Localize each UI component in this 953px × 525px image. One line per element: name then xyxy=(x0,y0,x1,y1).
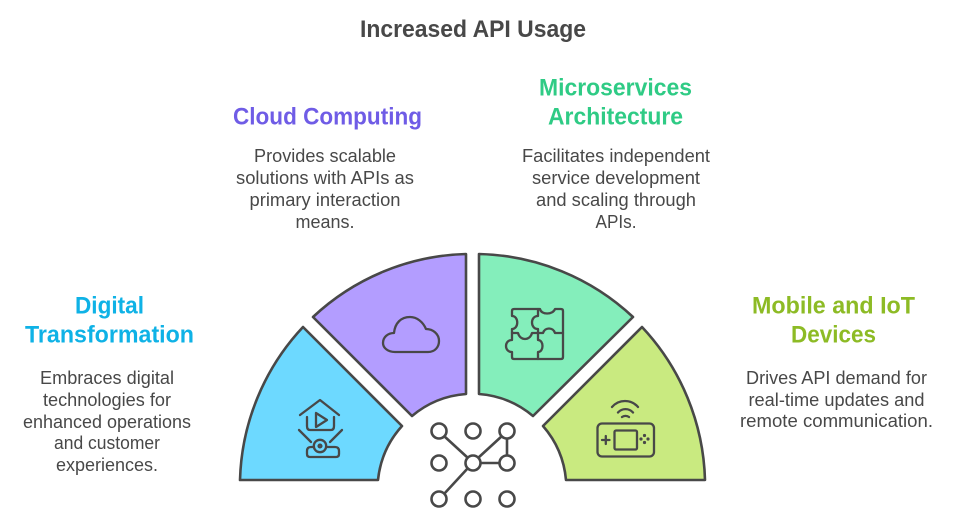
body: digital transformation: experiences. xyxy=(56,455,158,475)
segment: digital transformation xyxy=(240,327,402,480)
body: cloud computing: means. xyxy=(296,212,354,232)
heading: microservices architecture: Architecture xyxy=(548,104,683,130)
panel: microservices text xyxy=(522,74,710,232)
heading: cloud computing: Cloud Computing xyxy=(233,104,422,130)
heading: microservices architecture: Microservices xyxy=(539,74,692,102)
icon: home video device xyxy=(299,400,342,457)
heading: mobile and iot devices: Devices xyxy=(791,322,876,348)
body: microservices architecture xyxy=(522,146,710,232)
panel: digital transformation text xyxy=(23,292,194,475)
body: mobile and iot devices: real-time updates and xyxy=(748,390,924,410)
icon: puzzle xyxy=(506,309,563,359)
body: mobile and iot devices: remote communication. xyxy=(740,411,933,431)
heading: microservices architecture xyxy=(539,74,692,130)
title: Increased API Usage xyxy=(360,16,586,43)
body: cloud computing: primary interaction xyxy=(250,190,400,210)
heading: digital transformation: Digital xyxy=(75,292,144,320)
body: cloud computing: Provides scalable xyxy=(254,146,396,166)
body: mobile and iot devices: Drives API demand for xyxy=(746,368,927,388)
heading: digital transformation xyxy=(25,292,194,348)
body: cloud computing: solutions with APIs as xyxy=(236,168,414,188)
body: digital transformation: and customer xyxy=(54,433,160,453)
body: digital transformation: Embraces digital xyxy=(40,368,174,388)
segment: mobile and iot xyxy=(543,327,705,480)
heading: digital transformation: Transformation xyxy=(25,322,194,348)
body: digital transformation: technologies for xyxy=(43,390,171,410)
panel: mobile and iot text xyxy=(740,292,933,431)
body: digital transformation: enhanced operations xyxy=(23,412,191,432)
body: microservices architecture: APIs. xyxy=(596,212,636,232)
panel: cloud computing text xyxy=(233,104,422,232)
segment: cloud computing xyxy=(313,254,466,416)
icon: network nodes xyxy=(432,424,514,506)
body: digital transformation xyxy=(23,368,191,475)
icon: handheld game console xyxy=(598,401,654,456)
body: microservices architecture: Facilitates independent xyxy=(522,146,710,166)
segment: microservices xyxy=(479,254,633,416)
body: microservices architecture: and scaling through xyxy=(536,190,696,210)
heading: mobile and iot devices: Mobile and IoT xyxy=(752,292,915,320)
body: cloud computing xyxy=(236,146,414,232)
body: mobile and iot devices xyxy=(740,368,933,431)
icon: cloud xyxy=(383,317,439,352)
heading: mobile and iot devices xyxy=(752,292,915,348)
body: microservices architecture: service development xyxy=(532,168,700,188)
